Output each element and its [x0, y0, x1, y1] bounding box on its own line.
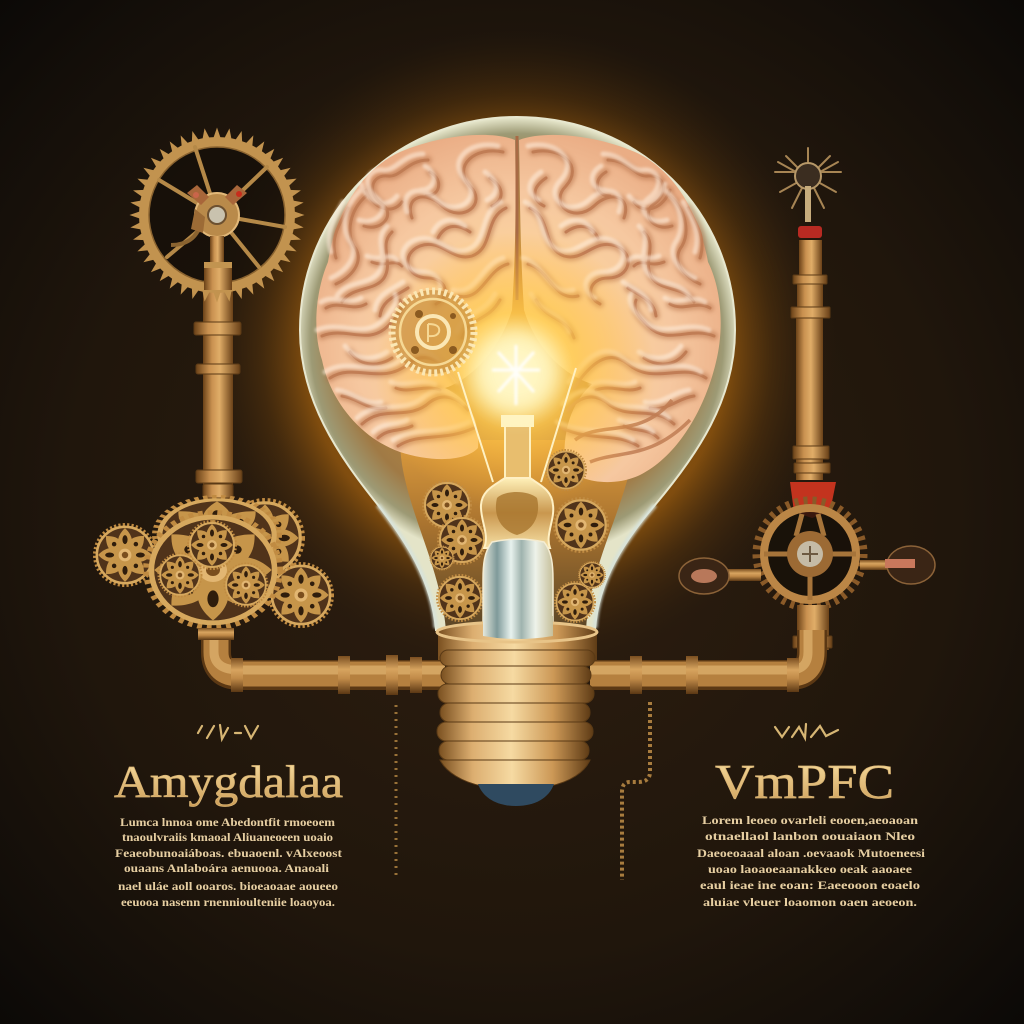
rings: [437, 650, 595, 760]
right pipe assembly: [679, 148, 935, 650]
bulb screw base: [437, 616, 597, 806]
central light glow: [375, 232, 655, 512]
body text left: [115, 817, 342, 909]
collar: [438, 622, 597, 660]
dotted wire right: [622, 702, 650, 880]
body text left: ouaans Anlaboára aenuooa. Anaoali: [124, 863, 330, 875]
body text left: eeuooa nasenn rnennioulteniie loaoyoa.: [121, 897, 335, 909]
crown inner: [496, 492, 538, 535]
body text right: Lorem leoeo ovarleli eooen,aeoaoan: [702, 815, 919, 827]
ornament right: [775, 724, 838, 738]
right horizontal pipe with elbow: [590, 630, 812, 694]
base taper: [440, 760, 590, 786]
bulb halo glow: [197, 30, 837, 670]
silver glass bottle: [483, 539, 553, 634]
body text left: nael uláe aoll ooaros. bioeaoaae aoueeo: [118, 881, 338, 893]
neck rim highlights: [378, 505, 655, 628]
body text right: aluiae vleuer loaomon oaen aeoeon.: [703, 897, 917, 909]
heading Amygdala: Amygdalaa: [114, 756, 343, 807]
large spoked gear: [130, 128, 304, 302]
gear cluster: [95, 497, 332, 626]
collar rim: [437, 622, 597, 642]
bulb interior gears: [424, 450, 607, 622]
body text right: otnaellaol lanbon oouaiaon Nleo: [705, 831, 915, 843]
lower right flange: [793, 636, 832, 648]
right hemisphere: [519, 135, 721, 482]
red valve: [790, 482, 836, 518]
left pipe collars: [198, 628, 422, 695]
ornament left: [198, 725, 258, 739]
right pipe flanges: [791, 275, 830, 473]
heading VmPFC: VmPFC: [715, 754, 894, 809]
filament sparkle: [474, 330, 558, 414]
right small bulb: [860, 546, 935, 584]
gear on brain: [391, 290, 475, 374]
filament wires: [458, 368, 576, 482]
upper narrow fitting: [799, 240, 822, 280]
gear mount: [204, 236, 232, 290]
left vertical pipe: [203, 280, 233, 505]
body text left: Feaeobunoaiáboas. ebuaoenl. vAlxeoost: [115, 848, 342, 860]
brain midline: [516, 136, 518, 300]
filament neck: [501, 415, 534, 478]
left pipe flanges: [194, 322, 242, 498]
golden crown stopper: [481, 478, 553, 548]
bulb neck interior: [400, 440, 635, 630]
brain: [316, 135, 721, 482]
panel: Amygdala: [114, 725, 343, 909]
body text left: Lumca lnnoa ome Abedontfit rmoeoem: [120, 817, 335, 829]
left pipe assembly: [95, 128, 332, 626]
left hemisphere: [316, 135, 516, 459]
top red cap: [798, 226, 822, 238]
lower right pipe: [797, 605, 829, 650]
body text left: tnaoulvraiis kmaoal Aliuaneoeen uoaio: [122, 832, 333, 844]
body text right: Daeoeoaaal aloan .oevaaok Mutoeneesi: [697, 848, 926, 860]
blue contact tip: [478, 784, 554, 806]
body text right: [697, 815, 926, 909]
light bulb glass: [300, 117, 735, 630]
left horizontal pipe with elbow: [198, 628, 445, 695]
right pipe collars: [630, 656, 799, 694]
left small bulb: [679, 558, 761, 594]
valve wheel: [757, 501, 863, 607]
right vertical pipe: [796, 310, 823, 480]
top spark fitting: [775, 148, 841, 222]
body text right: eaul ieae ine eoan: Eaeeooon eoaelo: [700, 880, 920, 892]
body text right: uoao laoaoeaanakkeo oeak aaoaee: [708, 864, 912, 876]
panel: VmPFC: [697, 724, 926, 909]
dotted wire left: [394, 705, 398, 880]
silver bottle base front: [483, 616, 553, 639]
